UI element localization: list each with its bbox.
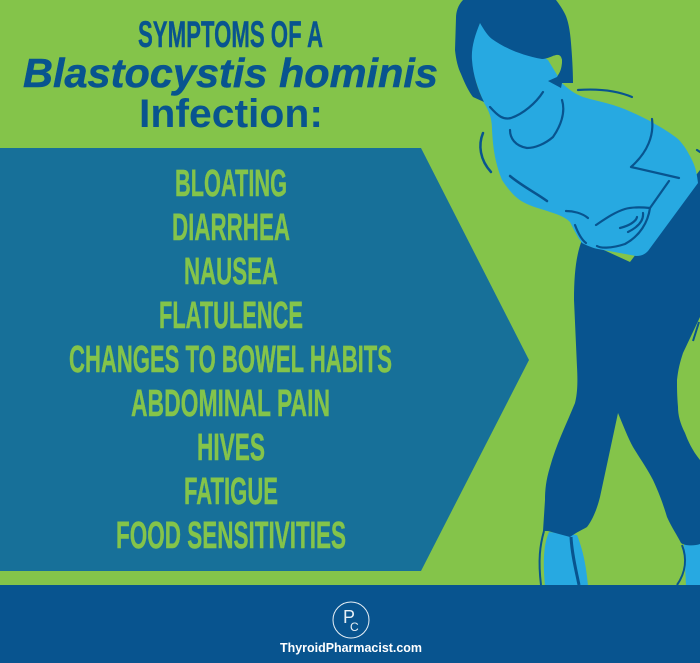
website url: ThyroidPharmacist.com [280,640,422,655]
symptoms list: HIVES [197,427,265,469]
logo badge: C [350,620,359,634]
symptoms list: ABDOMINAL PAIN [131,383,330,425]
icon: hair [455,0,573,102]
title: Blastocystis hominis [23,50,438,96]
symptoms list: FLATULENCE [159,295,303,337]
logo badge [333,602,369,638]
symptoms list: BLOATING [175,163,287,205]
icon: body contour lines [480,90,700,248]
panel: symptoms arrow [0,148,529,571]
symptoms list: FOOD SENSITIVITIES [116,515,346,557]
symptoms list: FATIGUE [184,471,278,513]
icon: ear gap [553,55,562,75]
title: Infection: [139,92,323,136]
icon: lower legs [544,532,700,586]
icon: trousers [543,170,700,545]
footer band [0,585,700,663]
logo badge: P [343,607,355,627]
illustration: woman holding stomach [455,0,700,586]
symptoms list [69,163,392,557]
symptoms list: CHANGES TO BOWEL HABITS [69,339,392,381]
icon: leg outlines [540,322,699,585]
icon: torso and face [471,23,698,256]
title: SYMPTOMS OF A [138,14,323,55]
symptoms list: NAUSEA [184,251,278,293]
title [23,14,438,136]
symptoms list: DIARRHEA [172,207,290,249]
